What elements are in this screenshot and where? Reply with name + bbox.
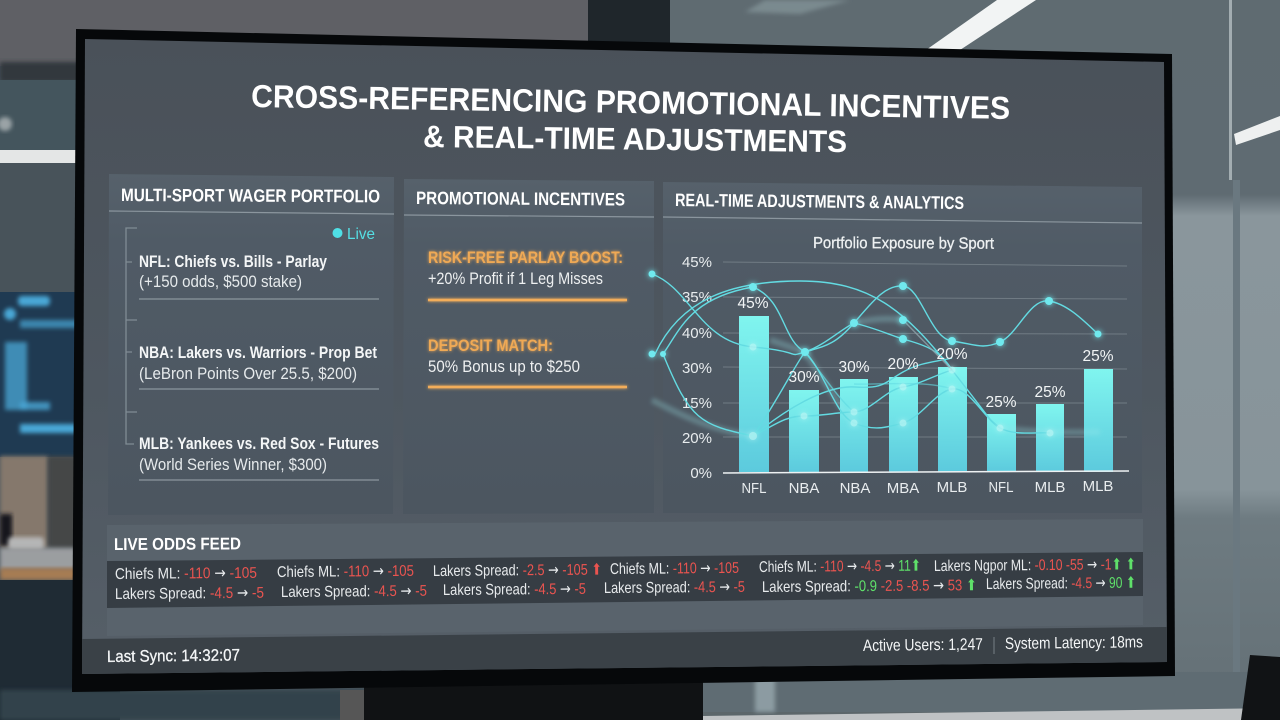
y axis labels: 45% <box>682 254 712 271</box>
system latency: System Latency: 18ms <box>1005 633 1143 653</box>
feed heading: LIVE ODDS FEED <box>114 534 241 554</box>
chart title: Portfolio Exposure by Sport <box>813 235 995 253</box>
panel: real-time adjustments and analytics <box>648 182 1142 513</box>
ticker row 1: Chiefs ML: -110 → -105 <box>610 559 739 578</box>
promo: deposit match: 50% Bonus up to $250 <box>428 358 580 376</box>
live indicator: Live <box>347 226 375 243</box>
x axis labels: NFL <box>742 480 766 497</box>
last sync: Last Sync: 14:32:07 <box>107 646 240 666</box>
ticker row 2: Lakers Spread: -4.5 → -5 <box>443 580 586 599</box>
promo: deposit match <box>428 336 627 388</box>
y axis labels: 35% <box>682 289 712 306</box>
ticker row 1: Chiefs ML: -110 → -105 <box>277 562 414 581</box>
monitor bezel <box>72 29 1175 692</box>
ticker row 2: Lakers Spread: -4.5 → 90 ⬆ <box>986 574 1136 593</box>
live indicator <box>332 226 375 243</box>
promo: risk-free parlay boost <box>428 248 627 301</box>
bar value labels: 20% <box>887 356 919 373</box>
wager: NFL: NFL: Chiefs vs. Bills - Parlay <box>139 253 328 271</box>
bar value labels: 25% <box>985 394 1017 411</box>
ticker row 1: Chiefs ML: -110 → -105 <box>115 564 257 583</box>
title: CROSS-REFERENCING PROMOTIONAL INCENTIVES <box>251 78 1010 126</box>
wager: MLB: (World Series Winner, $300) <box>139 456 327 474</box>
bar value labels: 30% <box>838 359 870 376</box>
panel: promotional incentives <box>403 179 654 514</box>
wager: MLB <box>139 435 379 480</box>
panel: live odds feed <box>107 519 1143 636</box>
y axis labels: 40% <box>682 325 712 342</box>
panel heading: analytics: REAL-TIME ADJUSTMENTS & ANALYTICS <box>675 190 964 213</box>
active users: Active Users: 1,247 <box>863 636 983 655</box>
promo: risk-free parlay boost: RISK-FREE PARLAY BOOST: <box>428 248 623 267</box>
bar value labels: 25% <box>1082 348 1114 365</box>
ticker row 2: Lakers Spread: -4.5 → -5 <box>281 582 427 601</box>
trend lines <box>652 274 1098 436</box>
wager: MLB: MLB: Yankees vs. Red Sox - Futures <box>139 435 379 453</box>
x axis labels: NFL <box>988 479 1014 496</box>
ticker row 2: Lakers Spread: -4.5 → -5 <box>604 578 745 597</box>
chart: portfolio exposure by sport <box>648 254 1129 497</box>
ticker row 1 <box>115 555 1136 583</box>
y axis labels: 0% <box>690 465 712 482</box>
ticker row 2 <box>115 574 1136 603</box>
y axis labels: 30% <box>682 360 712 377</box>
promo: deposit match: DEPOSIT MATCH: <box>428 336 553 355</box>
x axis labels: MLB <box>1083 478 1113 495</box>
x axis labels: NBA <box>840 480 870 497</box>
panel heading: promotions: PROMOTIONAL INCENTIVES <box>416 188 625 209</box>
bar value labels: 45% <box>737 295 769 312</box>
y axis labels <box>682 254 712 482</box>
x axis labels: MBA <box>887 480 919 497</box>
bars <box>739 316 1113 472</box>
title: & REAL-TIME ADJUSTMENTS <box>423 119 847 159</box>
bar value labels: 25% <box>1034 384 1066 401</box>
ticker background <box>107 552 1143 608</box>
wager: NFL: (+150 odds, $500 stake) <box>139 273 302 291</box>
monitor screen <box>82 39 1167 674</box>
panel heading: portfolio: MULTI-SPORT WAGER PORTFOLIO <box>121 185 380 206</box>
ticker row 2: Lakers Spread: -0.9 -2.5 -8.5 → 53 ⬆ <box>762 576 977 596</box>
wager: NBA: (LeBron Points Over 25.5, $200) <box>139 365 357 383</box>
x axis labels: MLB <box>937 479 967 496</box>
ticker row 1: Lakers Spread: -2.5 → -105 ⬆ <box>433 561 602 580</box>
status bar background <box>82 627 1167 674</box>
bar value labels: 30% <box>788 369 820 386</box>
foreground dark object <box>1241 655 1280 720</box>
trend line glow <box>652 319 1100 436</box>
y axis labels: 15% <box>682 395 712 412</box>
wager: NBA: NBA: Lakers vs. Warriors - Prop Bet <box>139 344 377 362</box>
ticker row 2: Lakers Spread: -4.5 → -5 <box>115 584 264 603</box>
x axis labels: MLB <box>1035 479 1065 496</box>
wager: NFL <box>139 253 379 299</box>
x axis labels <box>742 478 1113 497</box>
panel: multi-sport wager portfolio <box>108 174 394 515</box>
x axis labels: NBA <box>789 480 819 497</box>
bracket connector <box>126 228 137 444</box>
wager: NBA <box>139 344 379 389</box>
y axis labels: 20% <box>682 430 712 447</box>
bar value labels: 20% <box>936 346 968 363</box>
ticker row 1: Chiefs ML: -110 → -4.5 → 11⬆ <box>759 557 921 576</box>
ticker row 1: Lakers Ngpor ML: -0.10 -55 → -1⬆ ⬆ <box>934 555 1136 575</box>
trend nodes <box>648 270 1102 358</box>
title <box>251 78 1010 159</box>
bar value labels <box>737 295 1114 411</box>
monitor stand <box>364 680 703 720</box>
status bar <box>107 633 1143 666</box>
promo: risk-free parlay boost: +20% Profit if 1 Leg Misses <box>428 270 603 288</box>
